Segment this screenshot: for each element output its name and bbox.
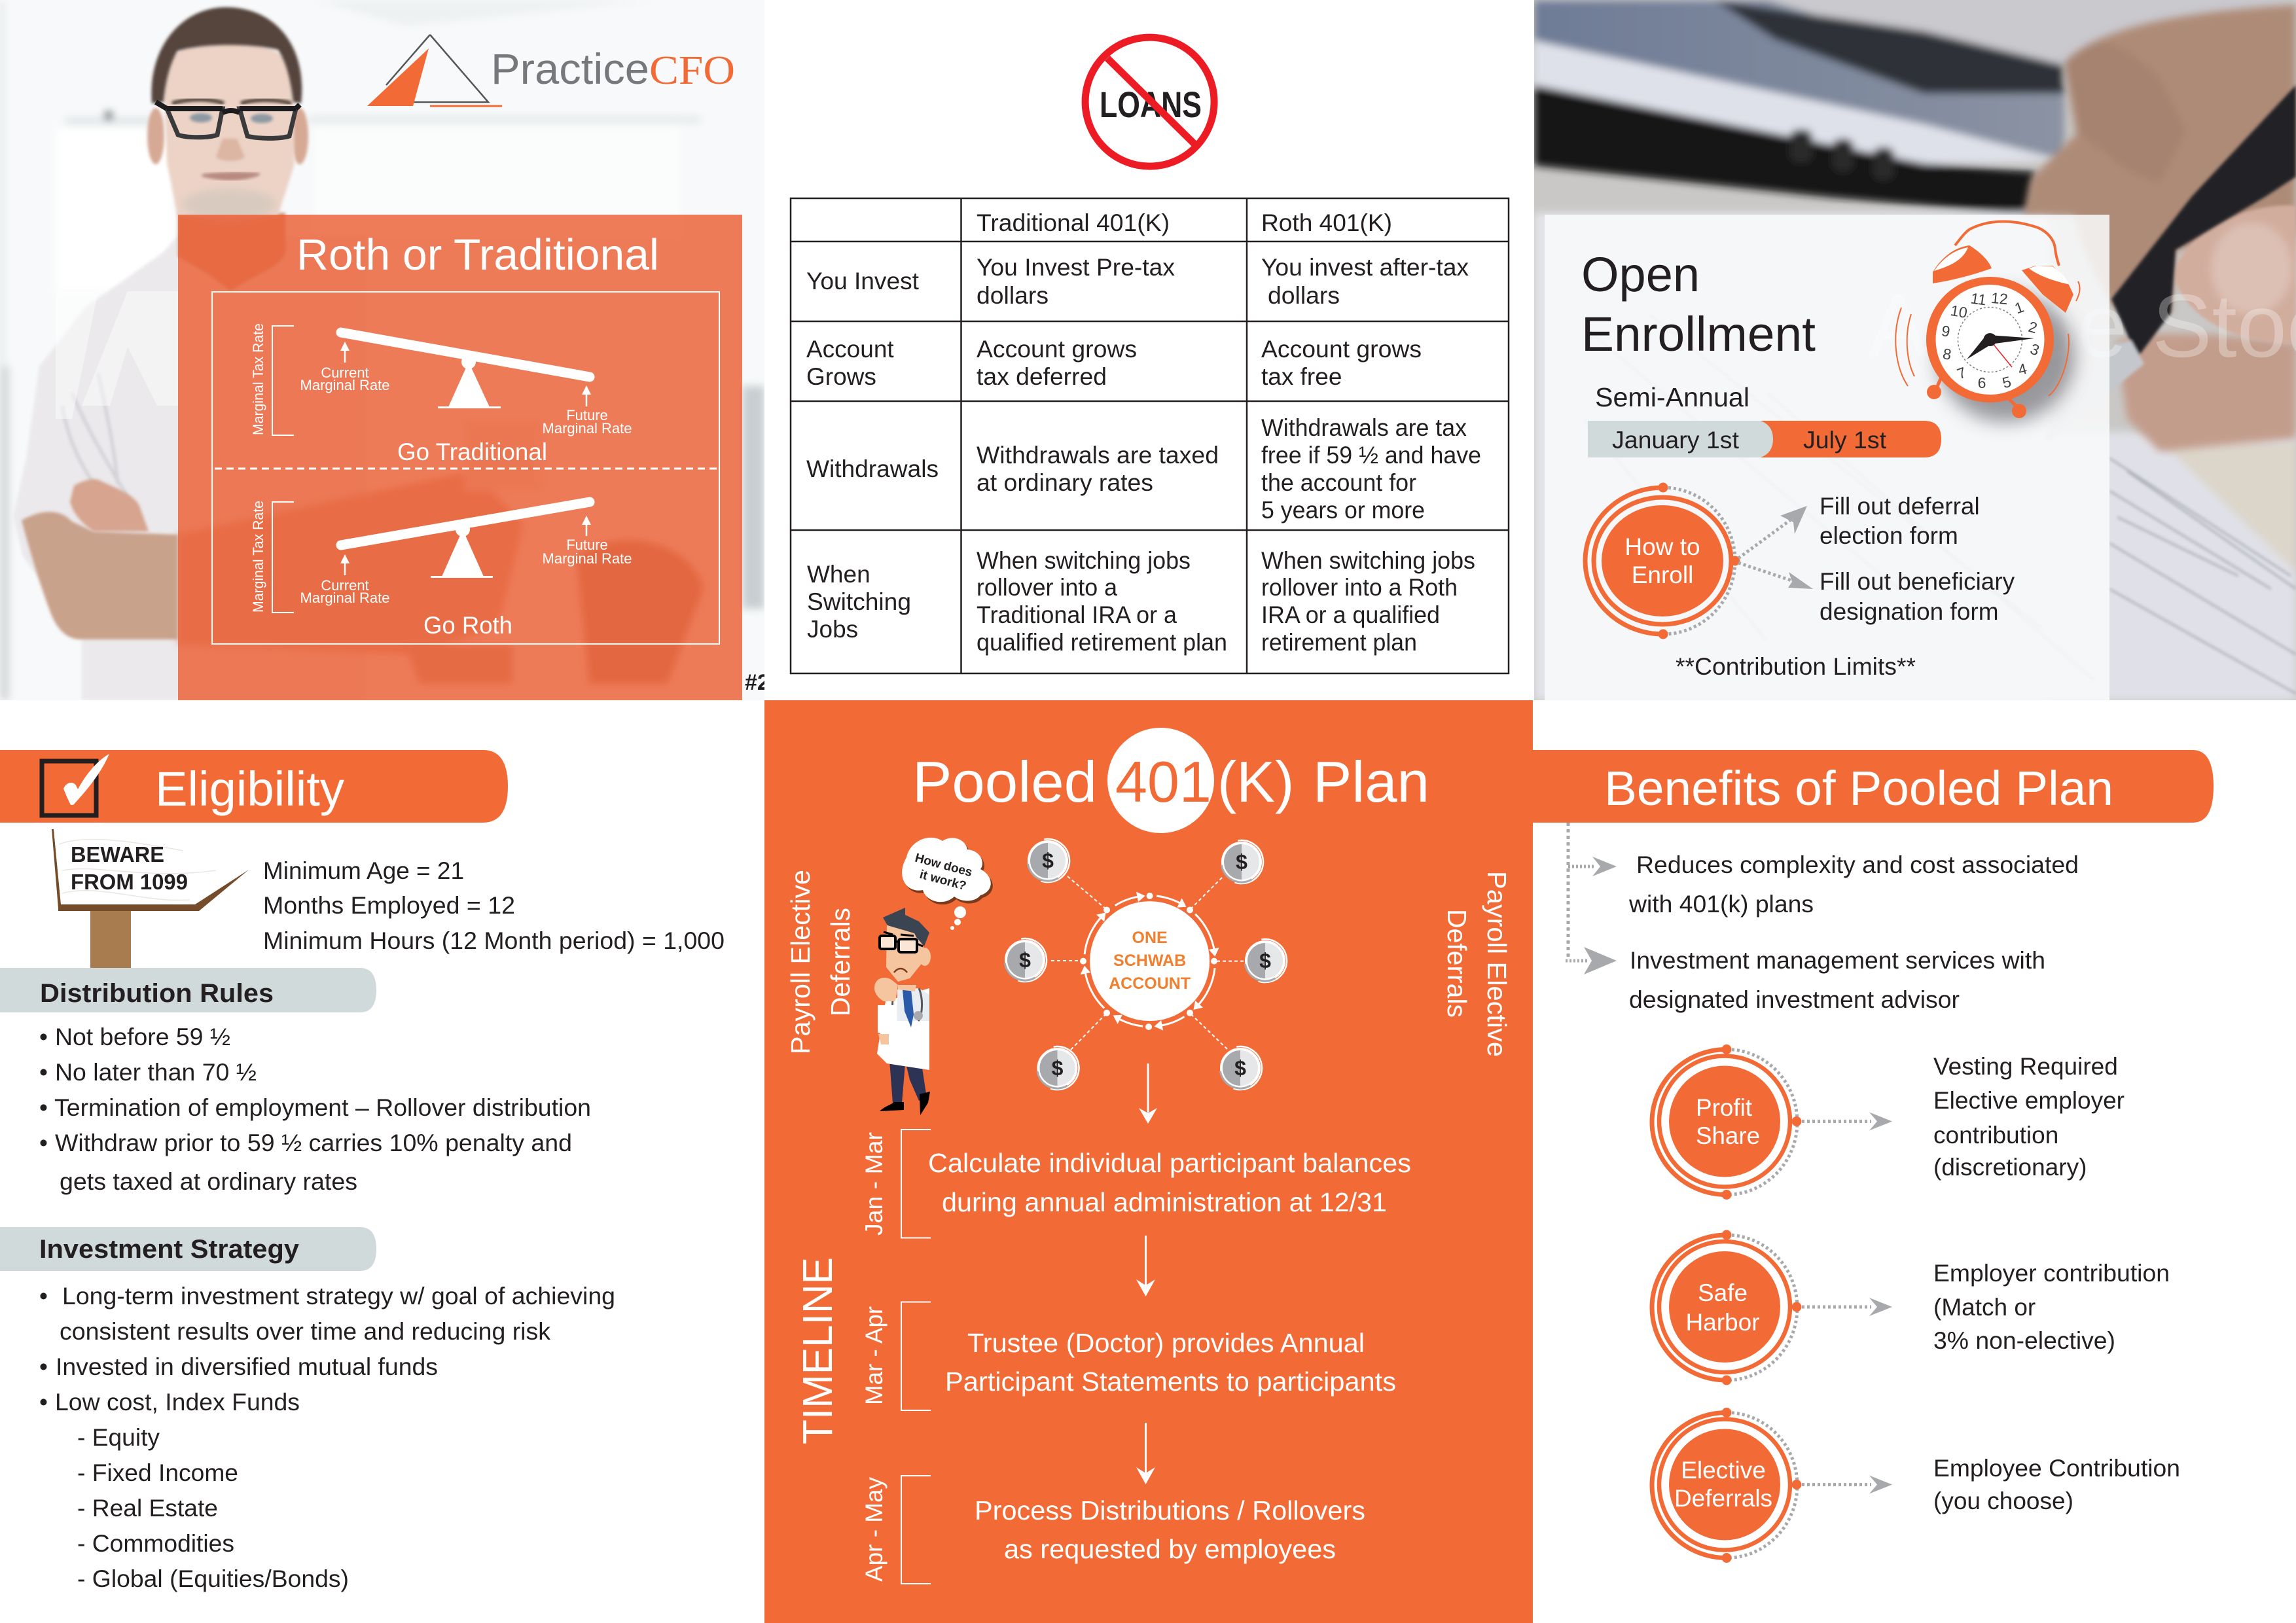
alarm clock icon: 8 [1941,345,1953,363]
row: Withdrawals [806,414,1481,524]
clipped stock id: #2 [745,670,770,695]
timeline step: Apr - May: Process Distributions / Rollovers [975,1495,1365,1525]
row: Account Grows: Account grows [1261,336,1422,363]
row: You Invest: You Invest [806,268,920,294]
panel: Benefits of Pooled Plan [1533,750,2214,1563]
row: You Invest: You Invest Pre-tax [977,254,1175,281]
seesaw: Go Roth: Marginal Tax Rate [250,501,266,613]
contribution type: Elective Deferrals: Employee Contribution [1933,1455,2180,1482]
eligibility requirements [263,857,725,954]
benefit: reduces complexity: with 401(k) plans [1628,891,1814,918]
distribution rules header: Distribution Rules [40,979,274,1008]
thought bubble: How does it work? [902,838,993,930]
enrollment dates pill: January 1st [1612,427,1740,454]
investment strategy list [39,1283,615,1592]
distribution rules list: gets taxed at ordinary rates [60,1168,357,1195]
investment strategy header: Investment Strategy [39,1235,300,1264]
row: Withdrawals: Withdrawals are taxed [977,442,1219,469]
timeline step: Mar - Apr [861,1302,1396,1410]
timeline label: TIMELINE [794,1257,841,1444]
inner frame [212,292,719,644]
contribution type: Safe Harbor: (Match or [1933,1294,2036,1321]
doctor photo figure [13,7,704,700]
thought bubble: How does it work?: it work? [918,868,968,893]
dotted connector with arrows [1566,823,1617,974]
neck [178,213,285,291]
How to Enroll diagram: election form [1820,522,1958,549]
eligibility requirements: Minimum Age = 21 [263,857,464,884]
benefit: reduces complexity: Reduces complexity and cost associated [1636,851,2079,878]
doctor cartoon [874,908,931,1115]
eligibility header bar [0,750,508,823]
distribution rules list: • [39,1059,48,1086]
contribution type: Profit Share: Share [1696,1122,1760,1149]
row: Account Grows: tax free [1261,363,1342,390]
row: You Invest: You invest after-tax [1261,254,1469,281]
side label: right payroll deferrals: Deferrals [1442,909,1472,1018]
row: You Invest: dollars [1268,282,1340,309]
row: When Switching Jobs: When switching jobs [977,547,1191,574]
row: When Switching Jobs: Switching [807,588,911,615]
distribution rules header [0,968,376,1012]
alarm clock icon: 1 [2013,298,2026,317]
row: When Switching Jobs: When switching jobs [1261,547,1475,574]
coin icons: $ [1236,850,1247,874]
contribution type: Safe Harbor: Harbor [1685,1309,1760,1336]
comparison table: Traditional vs Roth [791,198,1509,673]
panel: Pooled 401(K) Plan [764,700,1533,1623]
alarm clock icon: 5 [2000,373,2013,391]
seesaw: Go Roth: Marginal Rate [300,590,389,606]
BEWARE sign: FROM 1099 [71,870,188,894]
BEWARE sign [52,829,249,969]
seesaw: Go Traditional: Marginal Rate [300,377,389,393]
row: When Switching Jobs: Jobs [807,616,858,643]
How to Enroll diagram [1585,483,2015,639]
contribution type: Safe Harbor: Safe [1698,1279,1748,1306]
investment strategy list: Low cost, Index Funds [55,1389,300,1416]
timeline step: Mar - Apr: Trustee (Doctor) provides Annual [967,1328,1365,1358]
center circle: ACCOUNT [1109,974,1191,993]
logo: PracticeCFO [367,35,735,106]
coin icons: $ [1042,849,1054,872]
contribution limits note: **Contribution Limits** [1676,653,1916,680]
arrow: step two to step three [1136,1423,1155,1484]
investment strategy header [0,1227,376,1271]
investment strategy list: - Commodities [77,1530,234,1557]
heading: Pooled 401(K) Plan [912,728,1429,833]
center circle: ONE [1132,929,1168,947]
enrollment dates pill: July 1st [1803,427,1887,454]
benefit: investment management [1629,947,2045,1013]
coin icons: $ [1052,1056,1064,1080]
contribution type: Elective Deferrals [1652,1408,2180,1563]
row: When Switching Jobs: When [807,561,870,588]
BEWARE sign: BEWARE [71,842,164,866]
enrollment dates pill [1588,421,1941,457]
timeline step: Mar - Apr: Participant Statements to participants [945,1366,1396,1397]
contribution type: Profit Share: contribution [1933,1122,2058,1149]
alarm clock icon: 2 [2026,318,2039,336]
thought bubble: How does it work?: How does [914,851,974,880]
How to Enroll diagram: Fill out deferral [1820,493,1980,520]
benefits header bar: Benefits of Pooled Plan [1604,761,2113,815]
row: Account Grows: Grows [806,363,876,390]
contribution type: Profit Share: (discretionary) [1933,1154,2087,1181]
timeline step: Apr - May: Apr - May [861,1477,888,1582]
alarm clock icon: 3 [2028,340,2041,359]
photo: hand signing paperwork [1534,0,2296,700]
diagram: one Schwab account [997,833,1293,1096]
row: When Switching Jobs [807,547,1475,656]
row: Account Grows: Account [806,336,894,363]
timeline step: Mar - Apr: Mar - Apr [861,1306,888,1405]
seesaw: Go Traditional [250,323,632,465]
investment strategy list: • [39,1283,48,1310]
distribution rules list: Withdraw prior to 59 ½ carries 10% penalty and [55,1130,572,1156]
coin icons: $ [1019,948,1031,972]
table header row: Traditional 401(K) [977,209,1170,236]
seesaw: Go Traditional: Marginal Rate [543,420,632,437]
alarm clock icon: 12 [1990,289,2009,308]
row: Withdrawals: 5 years or more [1261,497,1425,524]
row: Account Grows: tax deferred [977,363,1107,390]
coin icons [997,833,1293,1096]
eligibility requirements: Minimum Hours (12 Month period) = 1,000 [263,927,725,954]
side label: left payroll deferrals: Payroll Elective [785,870,816,1054]
head [147,7,308,220]
white coat [14,238,178,700]
timeline step: Apr - May [861,1476,1365,1584]
row: You Invest [806,254,1469,309]
pen [2043,85,2296,442]
timeline step: Jan - Mar: during annual administration at 12/31 [942,1187,1387,1217]
timeline step: Apr - May: as requested by employees [1004,1534,1336,1564]
contribution type: Profit Share: Vesting Required [1933,1053,2118,1080]
investment strategy list: - Equity [77,1424,160,1451]
logo watermark [56,291,178,419]
row: You Invest: dollars [977,282,1049,309]
logo: PracticeCFO: Practice [491,45,649,93]
distribution rules list: Termination of employment – Rollover distribution [54,1094,591,1121]
row: When Switching Jobs: Traditional IRA or a [977,601,1177,628]
contribution type: Safe Harbor: Employer contribution [1933,1260,2170,1287]
center circle [1071,887,1228,1035]
hand [2024,5,2296,452]
arrow: step one to step two [1136,1236,1155,1296]
alarm clock icon [1895,221,2080,422]
heading: Open Enrollment: Open [1581,247,1700,302]
Semi-Annual label: Semi-Annual [1595,382,1749,412]
distribution rules list: • [39,1024,48,1050]
contribution type: Safe Harbor [1652,1230,2170,1385]
alarm clock icon: 7 [1955,364,1968,382]
crossed arm [22,479,178,639]
seesaw: Go Roth [250,501,632,639]
row: Account Grows: Account grows [977,336,1137,363]
seesaw: Go Traditional: Marginal Tax Rate [250,323,266,435]
timeline step: Jan - Mar: Calculate individual participant balances [928,1148,1411,1178]
contribution type: Profit Share: Elective employer [1933,1087,2125,1114]
paperwork lines [1584,314,2296,694]
investment strategy list: • [39,1389,48,1416]
distribution rules list: • [39,1094,48,1121]
investment strategy list: - Fixed Income [77,1459,238,1486]
heading: Open Enrollment: Enrollment [1581,307,1816,361]
contribution type: Profit Share [1652,1044,2125,1200]
no loans icon [1085,37,1214,166]
contribution type: Profit Share: Profit [1696,1094,1753,1121]
heading: Pooled 401(K) Plan: 401 [1115,749,1211,814]
alarm clock icon: 6 [1978,374,1986,391]
row: When Switching Jobs: rollover into a [977,574,1117,601]
seesaw: Go Traditional: Go Traditional [397,438,547,465]
benefit: investment management: Investment management services with [1630,947,2045,974]
How to Enroll diagram: designation form [1820,598,1999,625]
How to Enroll diagram: Fill out beneficiary [1820,568,2015,595]
table header row [977,209,1392,236]
seesaw: Go Roth: Current [321,577,369,594]
heading: Open Enrollment [1581,247,1816,361]
row: When Switching Jobs: IRA or a qualified [1261,601,1440,628]
How to Enroll diagram: Enroll [1632,562,1693,588]
distribution rules list: • [39,1130,48,1156]
investment strategy list: - Real Estate [77,1495,218,1522]
investment strategy list: consistent results over time and reducing risk [60,1318,551,1345]
panel: Investment Strategy [0,1227,615,1592]
dashed coin connectors [1051,876,1244,1050]
panel: Distribution Rules [0,968,591,1195]
timeline step: Jan - Mar [861,1130,1411,1238]
heading: Roth or Traditional: Roth or Traditional [296,230,659,279]
How to Enroll diagram: How to [1624,533,1700,560]
seesaw: Go Traditional: Future [566,407,608,423]
row: Withdrawals: at ordinary rates [977,469,1153,496]
panel: Eligibility [0,750,725,969]
contribution type: Elective Deferrals: Deferrals [1674,1485,1772,1512]
benefit: investment management: designated investment advisor [1629,986,1960,1013]
row: Withdrawals: free if 59 ½ and have [1261,442,1481,469]
seesaw: Go Roth: Marginal Rate [543,550,632,567]
distribution rules list: No later than 70 ½ [55,1059,257,1086]
row: Withdrawals: the account for [1261,469,1416,496]
arrow: account to timeline [1139,1063,1157,1124]
row: Withdrawals: Withdrawals are tax [1261,414,1467,441]
no loans icon: LOANS [1100,84,1202,125]
seesaw: Go Traditional: Current [321,365,369,381]
benefits header bar [1533,750,2214,823]
panel: Roth or Traditional [178,215,742,700]
row: Withdrawals: Withdrawals [806,455,939,482]
blurred keyboard and desk [1534,0,2296,700]
coin icons: $ [1234,1056,1246,1080]
side label: right payroll deferrals: Payroll Elective [1482,871,1512,1057]
contribution type: Safe Harbor: 3% non-elective) [1933,1327,2115,1354]
seesaw: Go Roth: Go Roth [423,612,512,639]
investment strategy list: - Global (Equities/Bonds) [77,1565,349,1592]
panel: Open Enrollment [1545,215,2109,700]
eligibility header bar: Eligibility [155,762,344,816]
center circle: SCHWAB [1113,952,1186,970]
logo: PracticeCFO: CFO [649,48,735,93]
alarm clock icon: 4 [2016,360,2029,378]
heading: Pooled 401(K) Plan: (K) [1217,749,1294,814]
heading: Pooled 401(K) Plan: Plan [1313,749,1429,814]
distribution rules list: Not before 59 ½ [55,1024,230,1050]
table header row: Roth 401(K) [1261,209,1392,236]
arm and shapes behind panel [173,474,704,685]
contribution type: Elective Deferrals: (you choose) [1933,1488,2073,1514]
distribution rules list [39,1024,591,1195]
alarm clock icon: 9 [1940,322,1952,340]
row: When Switching Jobs: retirement plan [1261,629,1417,656]
alarm clock icon: 10 [1949,302,1969,321]
investment strategy list: • [39,1353,48,1380]
side label: right payroll deferrals [1442,871,1512,1057]
side label: left payroll deferrals: Deferrals [825,908,855,1016]
side label: left payroll deferrals [785,870,855,1054]
eligibility requirements: Months Employed = 12 [263,892,515,919]
timeline step: Jan - Mar: Jan - Mar [861,1132,888,1236]
coin icons: $ [1259,949,1271,972]
contribution type: Elective Deferrals: Elective [1681,1457,1766,1484]
benefit: reduces complexity [1628,851,2079,918]
seesaw: Go Roth: Future [566,537,608,553]
row: When Switching Jobs: rollover into a Roth [1261,574,1458,601]
row: When Switching Jobs: qualified retirement plan [977,629,1227,656]
alarm clock icon: 11 [1969,289,1988,309]
photo: doctor background panel [0,0,770,700]
investment strategy list: Long-term investment strategy w/ goal of achieving [62,1283,615,1310]
heading: Pooled 401(K) Plan: Pooled [912,749,1097,814]
row: Account Grows [806,336,1422,390]
investment strategy list: Invested in diversified mutual funds [56,1353,438,1380]
